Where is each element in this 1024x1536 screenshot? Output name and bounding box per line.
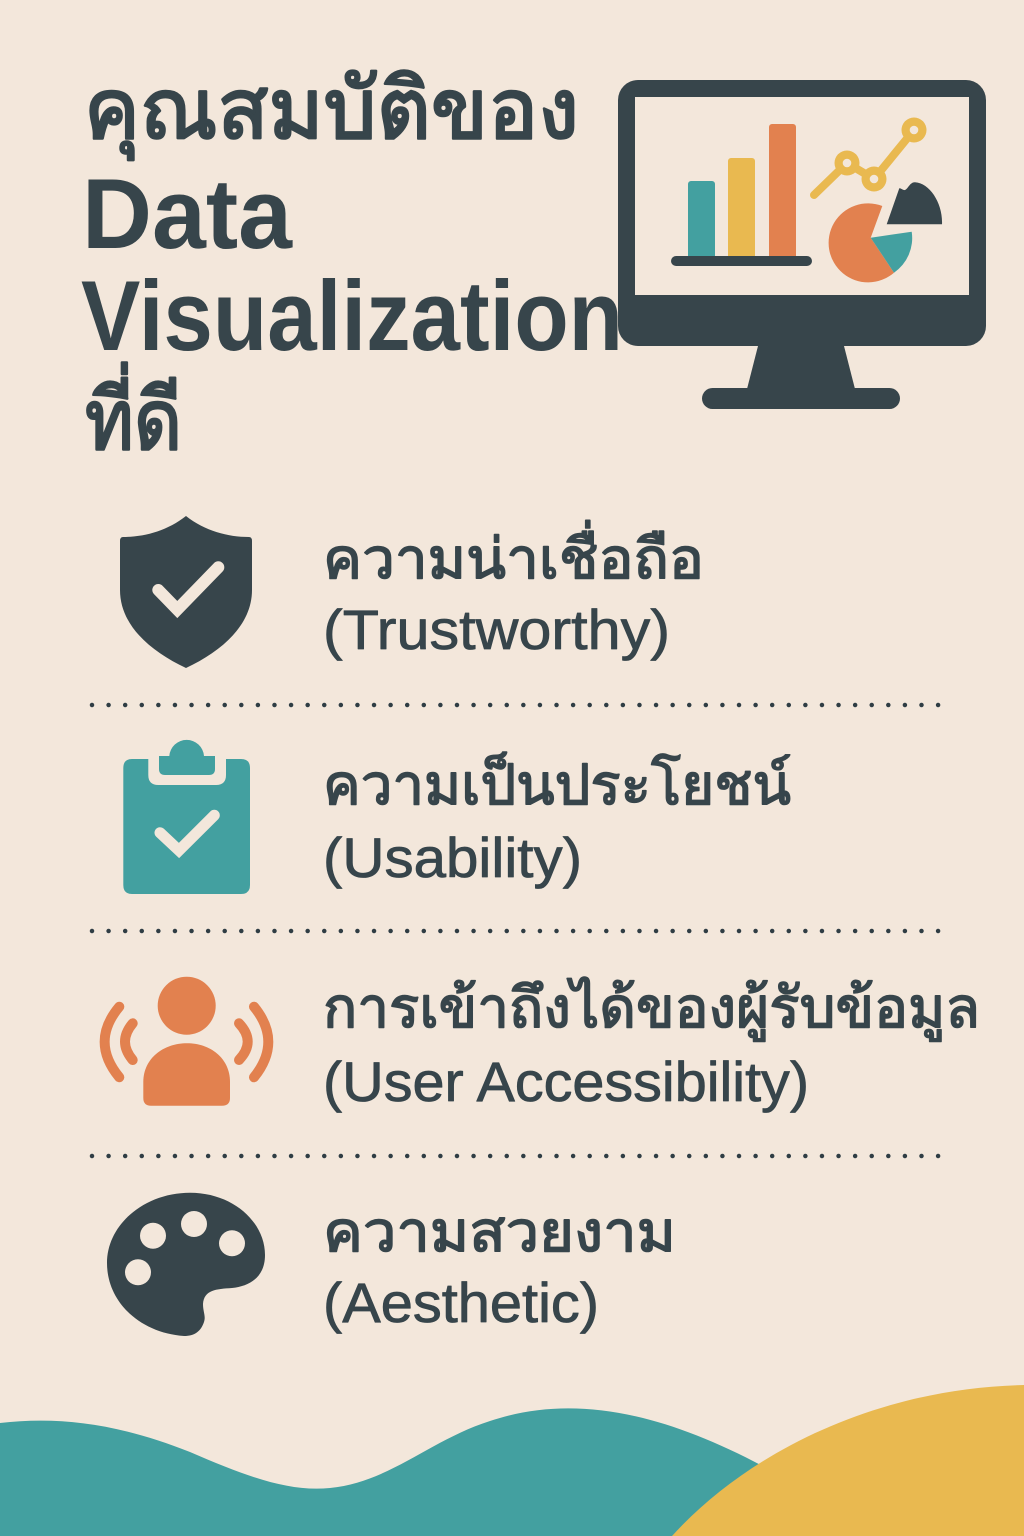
title: คุณสมบัติของ bbox=[84, 62, 579, 161]
item: trustworthy bbox=[120, 516, 704, 668]
title: Data bbox=[82, 158, 293, 269]
item: user accessibility bbox=[105, 976, 980, 1113]
icon: person with sound waves bbox=[105, 977, 268, 1106]
icon: clipboard with check bbox=[123, 740, 250, 894]
icon: monitor with charts bbox=[618, 80, 986, 409]
label: aesthetic: ความสวยงาม bbox=[323, 1200, 676, 1263]
label: trustworthy: (Trustworthy) bbox=[323, 598, 670, 661]
item: usability bbox=[123, 740, 791, 894]
label: usability bbox=[323, 751, 791, 889]
label: user accessibility bbox=[323, 976, 980, 1113]
title: ที่ดี bbox=[85, 362, 182, 467]
icon: paint palette bbox=[107, 1193, 265, 1336]
label: usability: ความเป็นประโยชน์ bbox=[323, 751, 791, 816]
label: trustworthy bbox=[323, 520, 704, 661]
label: user accessibility: (User Accessibility) bbox=[323, 1050, 809, 1113]
label: aesthetic bbox=[323, 1200, 676, 1334]
footer waves bbox=[0, 1385, 1024, 1536]
item: aesthetic bbox=[107, 1193, 676, 1336]
title bbox=[81, 62, 623, 467]
label: usability: (Usability) bbox=[323, 826, 582, 889]
label: user accessibility: การเข้าถึงได้ของผู้รับข้อมูล bbox=[323, 976, 980, 1042]
icon: shield with check bbox=[120, 516, 252, 668]
label: aesthetic: (Aesthetic) bbox=[323, 1271, 599, 1334]
title: Visualization bbox=[81, 260, 623, 371]
label: trustworthy: ความน่าเชื่อถือ bbox=[323, 520, 704, 590]
